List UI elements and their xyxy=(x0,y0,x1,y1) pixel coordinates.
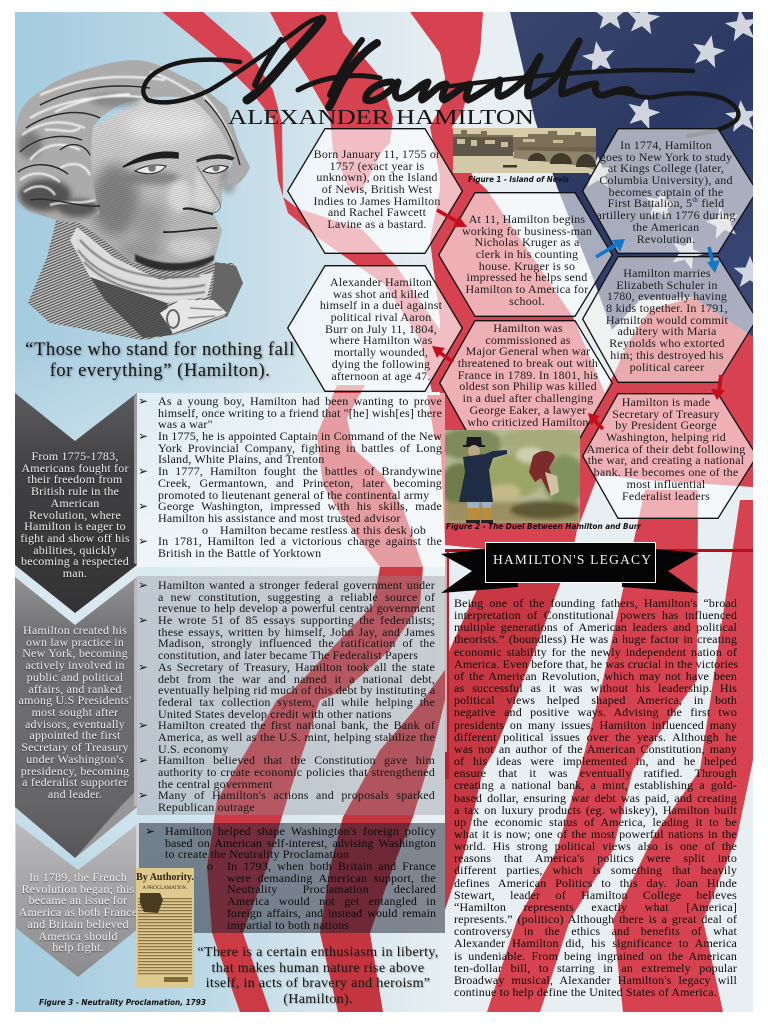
text block: Hamilton's legacy xyxy=(454,596,738,999)
panel: federalist bullets: He wrote 51 of 85 essays supporting the federalists; xyxy=(158,613,435,627)
chevron: federal government: own law practice in xyxy=(26,635,124,649)
chevron: French Revolution: became an issue for xyxy=(29,893,127,907)
hexagon: death in duel: himself in a duel against xyxy=(320,298,442,312)
panel: neutrality bullets: Hamilton helped shape Washington's foreign policy xyxy=(165,824,436,838)
signature xyxy=(141,14,741,138)
arrow: red, major general to duel xyxy=(432,346,454,364)
chevron: federal government: Secretary of Treasury xyxy=(21,740,129,754)
panel: federalist bullets: a new constitution, suggesting a reliable source of xyxy=(158,590,435,604)
panel: federalist bullets: Hamilton wanted a stronger federal government under xyxy=(158,578,435,592)
hexagon: major general: commissioned as xyxy=(485,333,571,347)
hexagon: age eleven clerk: working for business-man xyxy=(462,224,592,238)
text block: Hamilton's legacy: based dollar, ensuring war debt was paid, and creating xyxy=(454,790,737,804)
hexagon: birth xyxy=(287,128,463,254)
hexagon: age eleven clerk: Nicholas Kruger as a xyxy=(475,235,579,249)
title: ALEXANDER HAMILTON xyxy=(228,105,535,129)
hexagon: age eleven clerk: Hamilton to America for xyxy=(466,282,588,296)
hexagon: birth: 1757 (exact year is xyxy=(330,159,424,173)
chevron: revolution: becoming a respected xyxy=(21,554,129,568)
hexagon: marriage xyxy=(582,256,753,383)
hexagon: Secretary of Treasury: Federalist leaders xyxy=(622,488,710,502)
chevron: revolution: American xyxy=(51,496,99,510)
panel: federalist bullets: America, as well as the U.S. mint, helping stabilize the xyxy=(158,730,435,744)
hexagon: Kings College: artillery unit in 1776 during xyxy=(596,208,736,222)
hexagon: Kings College: In 1774, Hamilton xyxy=(620,138,712,152)
quote: those who stand for nothing xyxy=(25,339,296,382)
chevron: revolution: their freedom from xyxy=(28,472,122,486)
quote: enthusiasm in liberty: “There is a certain enthusiasm in liberty, xyxy=(197,945,439,960)
quote: enthusiasm in liberty: (Hamilton). xyxy=(283,992,353,1007)
hexagon: age eleven clerk: clerk in his counting xyxy=(476,247,578,261)
panel: federalist bullets: eventually helping rid much of this debt by instituting a xyxy=(158,683,435,697)
panel: federalist bullets: constitution, and later became The Federalist Papers xyxy=(158,648,418,662)
panel: federalist bullets: Hamilton created the first national bank, the Bank of xyxy=(158,718,435,732)
chevron: French Revolution xyxy=(16,823,139,977)
panel: revolution bullets: ➢ xyxy=(138,464,148,478)
hexagon: death in duel: Burr on July 11, 1804, xyxy=(325,322,437,336)
chevron: revolution: From 1775-1783, xyxy=(32,449,118,463)
panel: neutrality bullets: impartial to both nations xyxy=(227,918,349,932)
hexagon: major general: in a duel after challenging xyxy=(463,391,593,405)
hexagon: major general: George Eaker, a lawyer xyxy=(470,403,586,417)
hexagon: marriage: 1780, eventually having xyxy=(607,289,727,303)
panel: federalist bullets: Republican outrage xyxy=(158,800,255,814)
chevron: revolution: Hamilton is eager to xyxy=(24,519,126,533)
hexagon: marriage: political career xyxy=(630,360,704,374)
chevron: revolution: man. xyxy=(63,566,87,580)
panel: federalist bullets: these essays, written by himself, John Jay, and James xyxy=(158,625,435,639)
text block: Hamilton's legacy: multiple generations of American leaders and political xyxy=(454,620,737,634)
panel: federalist bullets: authority to create economic policies that strengthened xyxy=(158,765,435,779)
hexagon: Secretary of Treasury: Hamilton is made xyxy=(622,395,710,409)
hexagon: death in duel xyxy=(287,265,463,392)
photo: Neutrality Proclamation document: By Authority. xyxy=(136,872,194,883)
hexagon: Secretary of Treasury: the war, and creating a national xyxy=(588,453,744,467)
photo: Neutrality Proclamation document: A PROCLAMATION. xyxy=(142,886,188,891)
hexagon: Secretary of Treasury xyxy=(582,393,753,519)
chevron: federal government: presidency, becoming xyxy=(21,764,129,778)
text block: Hamilton's legacy: of the American Revolution, which may not have been xyxy=(454,669,737,683)
panel: revolution bullets: In 1775, he is appointed Captain in Command of the New xyxy=(158,429,442,443)
portrait of Alexander Hamilton (engraving) xyxy=(15,60,250,340)
arrow: red, marriage to Treasury xyxy=(711,374,725,400)
chevron: French Revolution: In 1789, the French xyxy=(29,870,127,884)
panel: neutrality bullets: foreign affairs, and instead would remain xyxy=(227,906,436,920)
hexagon: marriage: adultery with Maria xyxy=(617,324,717,338)
arrow: blue, clerk to Kings College xyxy=(595,239,625,258)
hexagon: Kings College: the American xyxy=(633,220,699,234)
panel: neutrality bullets: based on American self-interest, advising Washington xyxy=(165,836,436,850)
panel: revolution bullets: As a young boy, Hamilton had been wanting to prove xyxy=(158,394,442,408)
panel: revolution bullets: Hamilton became restless at this desk job xyxy=(220,523,426,537)
text block: Hamilton's legacy: represents.” (politico) Although there is a great deal of xyxy=(454,912,737,926)
quote: enthusiasm in liberty: that makes human nature rise above xyxy=(212,961,424,976)
caption: figure 1: Figure 1 - Island of Nevis xyxy=(468,175,569,184)
chevron: revolution xyxy=(15,393,137,613)
banner: Hamilton's Legacy xyxy=(441,542,699,593)
hexagon: major general: France in 1789. In 1801, his xyxy=(458,368,598,382)
panel: revolution bullets xyxy=(137,393,445,567)
hexagon: death in duel: Alexander Hamilton xyxy=(330,275,432,289)
panel: revolution bullets: In 1781, Hamilton led a victorious charge against the xyxy=(158,534,442,548)
panel: federalist bullets: ➢ xyxy=(138,660,148,674)
text block: Hamilton's legacy: ensure that it was eventually ratified. Through xyxy=(454,766,737,780)
panel: neutrality bullets: o xyxy=(207,859,213,873)
panel: federalist bullets: ➢ xyxy=(138,613,148,627)
text block: Hamilton's legacy: America. Even before that, he was crucial in the victories xyxy=(454,657,738,671)
hexagon: birth: Lavine as a bastard. xyxy=(327,217,427,231)
hexagon: marriage: Elizabeth Schuler in xyxy=(616,278,718,292)
hexagon: birth: Indies to James Hamilton xyxy=(313,194,441,208)
hexagon: death in duel: afternoon at age 47. xyxy=(331,368,431,382)
text block: Hamilton's legacy: defines American Politics to this day. Joan Hinde xyxy=(454,876,737,890)
panel: neutrality bullets: America would not get entangled in xyxy=(227,894,436,908)
panel: federalist bullets: ➢ xyxy=(138,718,148,732)
text block: Hamilton's legacy: of his ideas were implemented in, and he helped xyxy=(454,754,737,768)
chevron: French Revolution: help fight. xyxy=(52,940,104,954)
text block: Hamilton's legacy: “Hamilton represents exactly what [America] xyxy=(454,900,737,914)
text block: Hamilton's legacy: was not an author of the American Constitution, many xyxy=(454,742,737,756)
panel: federalist bullets: United States develop credit with other nations xyxy=(158,707,392,721)
chevron: French Revolution: Revolution began; this xyxy=(21,882,135,896)
hexagon: major general xyxy=(439,320,613,439)
chevron: French Revolution: America should xyxy=(38,929,118,943)
panel: federalist bullets: ➢ xyxy=(138,753,148,767)
panel: neutrality bullets: In 1793, when both Britain and France xyxy=(227,859,436,873)
text block: Hamilton's legacy: is undeniable. From being ingrained on the American xyxy=(454,949,737,963)
text block: Hamilton's legacy: Alexander Hamilton did, his significance to America xyxy=(454,936,737,950)
chevron: revolution: fight and show off his xyxy=(20,531,130,545)
hexagon: Kings College: Revolution. xyxy=(637,232,695,246)
panel: revolution bullets: ➢ xyxy=(138,534,148,548)
text block: Hamilton's legacy: negative and positive ways. Advising the first two xyxy=(454,705,737,719)
panel: neutrality bullets: to create the Neutrality Proclamation xyxy=(165,847,349,861)
hexagon: Kings College: First Battalion, 5th field xyxy=(608,196,724,210)
text block: Hamilton's legacy: ten-dollar bill, to starring in an extremely popular xyxy=(454,961,737,975)
panel: federalist bullets xyxy=(137,576,445,815)
text block: Hamilton's legacy: as successful as it was without his leadership. His xyxy=(454,681,737,695)
chevron: federal government: public and political xyxy=(27,670,123,684)
text block: Hamilton's legacy: world. His strong political views also is one of the xyxy=(454,839,737,853)
hexagon: Secretary of Treasury: bank. He becomes one of the xyxy=(594,465,738,479)
hexagon: Secretary of Treasury: Washington, helping rid xyxy=(606,430,726,444)
chevron: federal government: advisors, eventually xyxy=(25,717,125,731)
text block: Hamilton's legacy: economic stability for the newly independent nation of xyxy=(454,645,737,659)
hexagon: death in duel: where Hamilton was xyxy=(330,333,432,347)
panel: revolution bullets: York Provincial Company, fighting in battles of Long xyxy=(158,441,442,455)
hexagon: major general: oldest son Philip was killed xyxy=(459,379,597,393)
chevron: federal government: a federalist supporter xyxy=(22,775,128,789)
chevron: revolution: Americans fought for xyxy=(21,461,129,475)
panel: revolution bullets: o xyxy=(202,523,208,537)
photo: Neutrality Proclamation document xyxy=(136,868,194,988)
chevron: federal government: appointed the first xyxy=(29,728,121,742)
text block: Hamilton's legacy: what it is now; one of the most powerful nations in the xyxy=(454,827,737,841)
hexagon: Secretary of Treasury: America of their debt following xyxy=(587,442,745,456)
panel: federalist bullets: debt from the war and named it a national debt, xyxy=(158,672,435,686)
chevron: federal government: most sought after xyxy=(32,705,118,719)
panel: revolution bullets: himself, once writing to a friend that "[he] wish[es] there xyxy=(158,406,442,420)
hexagon: birth: unknown), on the Island xyxy=(316,170,438,184)
hexagon: Secretary of Treasury: most influential xyxy=(627,477,705,491)
panel: federalist bullets: U.S. economy xyxy=(158,742,228,756)
chevron: revolution: abilities, quickly xyxy=(33,543,117,557)
text block: Hamilton's legacy: different political issues over the years. Although he xyxy=(454,730,737,744)
hexagon: marriage: Hamilton marries xyxy=(623,266,711,280)
panel: revolution bullets: was a war" xyxy=(158,417,213,431)
panel: federalist bullets: ➢ xyxy=(138,788,148,802)
panel: federalist bullets: Hamilton believed that the Constitution gave him xyxy=(158,753,435,767)
text block: Hamilton's legacy: Broadway musical, Alexander Hamilton's legacy will xyxy=(454,973,737,987)
hexagon: Kings College: goes to New York to study xyxy=(600,150,732,164)
text block: Hamilton's legacy: political views helped shaped America, in both xyxy=(454,693,737,707)
photo: duel between Hamilton and Burr xyxy=(445,430,580,523)
text block: Hamilton's legacy: controversy in the ethics and benefits of what xyxy=(454,924,737,938)
chevron: federal government xyxy=(15,577,137,858)
panel: federalist bullets: As Secretary of Treasury, Hamilton took all the state xyxy=(158,660,435,674)
hexagon: birth: Born January 11, 1755 or xyxy=(314,147,440,161)
quote: those who stand for nothing: “Those who stand for nothing fall xyxy=(25,339,295,360)
hexagon: major general: threatened to break out with xyxy=(458,356,598,370)
panel: revolution bullets: Island, White Plains, and Trenton xyxy=(158,452,324,466)
panel: federalist bullets: Many of Hamilton's actions and proposals sparked xyxy=(158,788,435,802)
panel: federalist bullets: revenue to help develop a powerful central government xyxy=(158,601,435,615)
hexagon: major general: Major General when war xyxy=(466,344,590,358)
panel: federalist bullets: federal tax collection system, all while helping the xyxy=(158,695,435,709)
hexagon: Kings College: becomes captain of the xyxy=(609,185,723,199)
panel: revolution bullets: ➢ xyxy=(138,429,148,443)
chevron: federal government: under Washington's xyxy=(26,752,124,766)
text block: Hamilton's legacy: different parties, which is something that heavily xyxy=(454,863,737,877)
text block: Hamilton's legacy: Stewart, leader of Hamilton College believes xyxy=(454,888,737,902)
hexagon: age eleven clerk: school. xyxy=(509,294,545,308)
hexagon: Kings College: at Kings College (later, xyxy=(608,161,724,175)
panel: revolution bullets: ➢ xyxy=(138,394,148,408)
hexagon: age eleven clerk: At 11, Hamilton begins xyxy=(469,212,585,226)
text block: Hamilton's legacy: interpretation of Constitutional powers has influenced xyxy=(454,608,737,622)
panel: revolution bullets: ➢ xyxy=(138,499,148,513)
chevron: revolution: Revolution, where xyxy=(29,508,121,522)
panel: neutrality bullets: ➢ xyxy=(145,824,155,838)
hexagon: marriage: Hamilton would commit xyxy=(606,313,728,327)
hexagon: age eleven clerk: house. Kruger is so xyxy=(479,259,575,273)
panel: revolution bullets: Creek, Germantown, and Princeton, later becoming xyxy=(158,476,442,490)
hexagon: age eleven clerk: impressed he helps send xyxy=(467,270,587,284)
panel: revolution bullets: In 1777, Hamilton fought the battles of Brandywine xyxy=(158,464,442,478)
panel: neutrality bullets: Neutrality Proclamation declared xyxy=(227,882,436,896)
hexagon: Secretary of Treasury: Secretary of Treasury xyxy=(612,407,720,421)
hexagon: marriage: 8 kids together. In 1791, xyxy=(606,301,728,315)
quote: enthusiasm in liberty xyxy=(197,945,439,1007)
quote: enthusiasm in liberty: itself, in acts of bravery and heroism” xyxy=(206,976,430,991)
hexagon: Kings College: Columbia University), and xyxy=(599,173,733,187)
hexagon: major general: Hamilton was xyxy=(493,321,563,335)
panel: revolution bullets: Hamilton his assistance and most trusted advisor xyxy=(158,511,401,525)
panel: neutrality bullets xyxy=(139,823,445,933)
hexagon: death in duel: mortally wounded, xyxy=(334,345,428,359)
hexagon: death in duel: political rival Aaron xyxy=(331,310,431,324)
hexagon: death in duel: was shot and killed xyxy=(333,287,429,301)
text block: Hamilton's legacy: up the economic status of America, leading it to be xyxy=(454,815,737,829)
quote: those who stand for nothing: for everything” (Hamilton). xyxy=(50,360,270,381)
chevron: federal government: and leader. xyxy=(48,787,102,801)
hexagon: birth: and Rachel Fawcett xyxy=(328,205,426,219)
photo: Island of Nevis xyxy=(453,128,596,173)
panel: revolution bullets: George Washington, impressed with his skills, made xyxy=(158,499,442,513)
text block: Hamilton's legacy: Being one of the founding fathers, Hamilton's “broad xyxy=(454,596,737,610)
arrow: blue, Kings College to marriage xyxy=(707,246,720,273)
hexagon: marriage: him; this destroyed his xyxy=(610,348,724,362)
hexagon: birth: of Nevis, British West xyxy=(322,182,432,196)
hexagon: major general: who criticized Hamilton xyxy=(467,414,589,428)
chevron: federal government: affairs, and ranked xyxy=(28,682,122,696)
hexagon: age eleven clerk xyxy=(438,192,613,317)
text block: Hamilton's legacy: theorists.” (boundless) He was a huge factor in creating xyxy=(454,632,737,646)
hexagon: Secretary of Treasury: by President George xyxy=(615,418,717,432)
arrow: red, birth to clerk xyxy=(436,208,467,227)
chevron: federal government: Hamilton created his xyxy=(23,623,127,637)
banner: Hamilton's Legacy: HAMILTON'S LEGACY xyxy=(493,552,651,567)
chevron: French Revolution: America as both France xyxy=(19,905,137,919)
chevron: federal government: among U.S Presidents' xyxy=(19,693,131,707)
chevron: French Revolution: and Britain believed xyxy=(27,917,129,931)
text block: Hamilton's legacy: creating a national bank, a mint, establishing a gold- xyxy=(454,778,737,792)
text block: Hamilton's legacy: presidents on many issues, Hamilton influenced many xyxy=(454,718,737,732)
text block: Hamilton's legacy: reasons that America's politics were split into xyxy=(454,851,737,865)
hexagon: death in duel: dying the following xyxy=(332,357,430,371)
hexagon: marriage: Reynolds who extorted xyxy=(609,336,725,350)
hexagon: Kings College xyxy=(582,128,753,254)
panel: federalist bullets: ➢ xyxy=(138,578,148,592)
arrow: red, Treasury to major general xyxy=(588,413,604,430)
chevron: federal government: New York, becoming xyxy=(22,646,128,660)
chevron: federal government: actively involved in xyxy=(25,658,125,672)
panel: federalist bullets: the central government xyxy=(158,777,273,791)
panel: neutrality bullets: were demanding American support, the xyxy=(227,871,436,885)
panel: revolution bullets: promoted to lieutenant general of the continental army xyxy=(158,488,429,502)
panel: revolution bullets: British in the Battle of Yorktown xyxy=(158,546,321,560)
text block: Hamilton's legacy: a tax on luxury products (eg. whiskey), Hamilton built xyxy=(454,803,737,817)
text block: Hamilton's legacy: continue to help define the United States of America. xyxy=(454,985,717,999)
chevron: revolution: British rule in the xyxy=(31,484,119,498)
panel: federalist bullets: Madison, strongly influenced the ratification of the xyxy=(158,636,435,650)
